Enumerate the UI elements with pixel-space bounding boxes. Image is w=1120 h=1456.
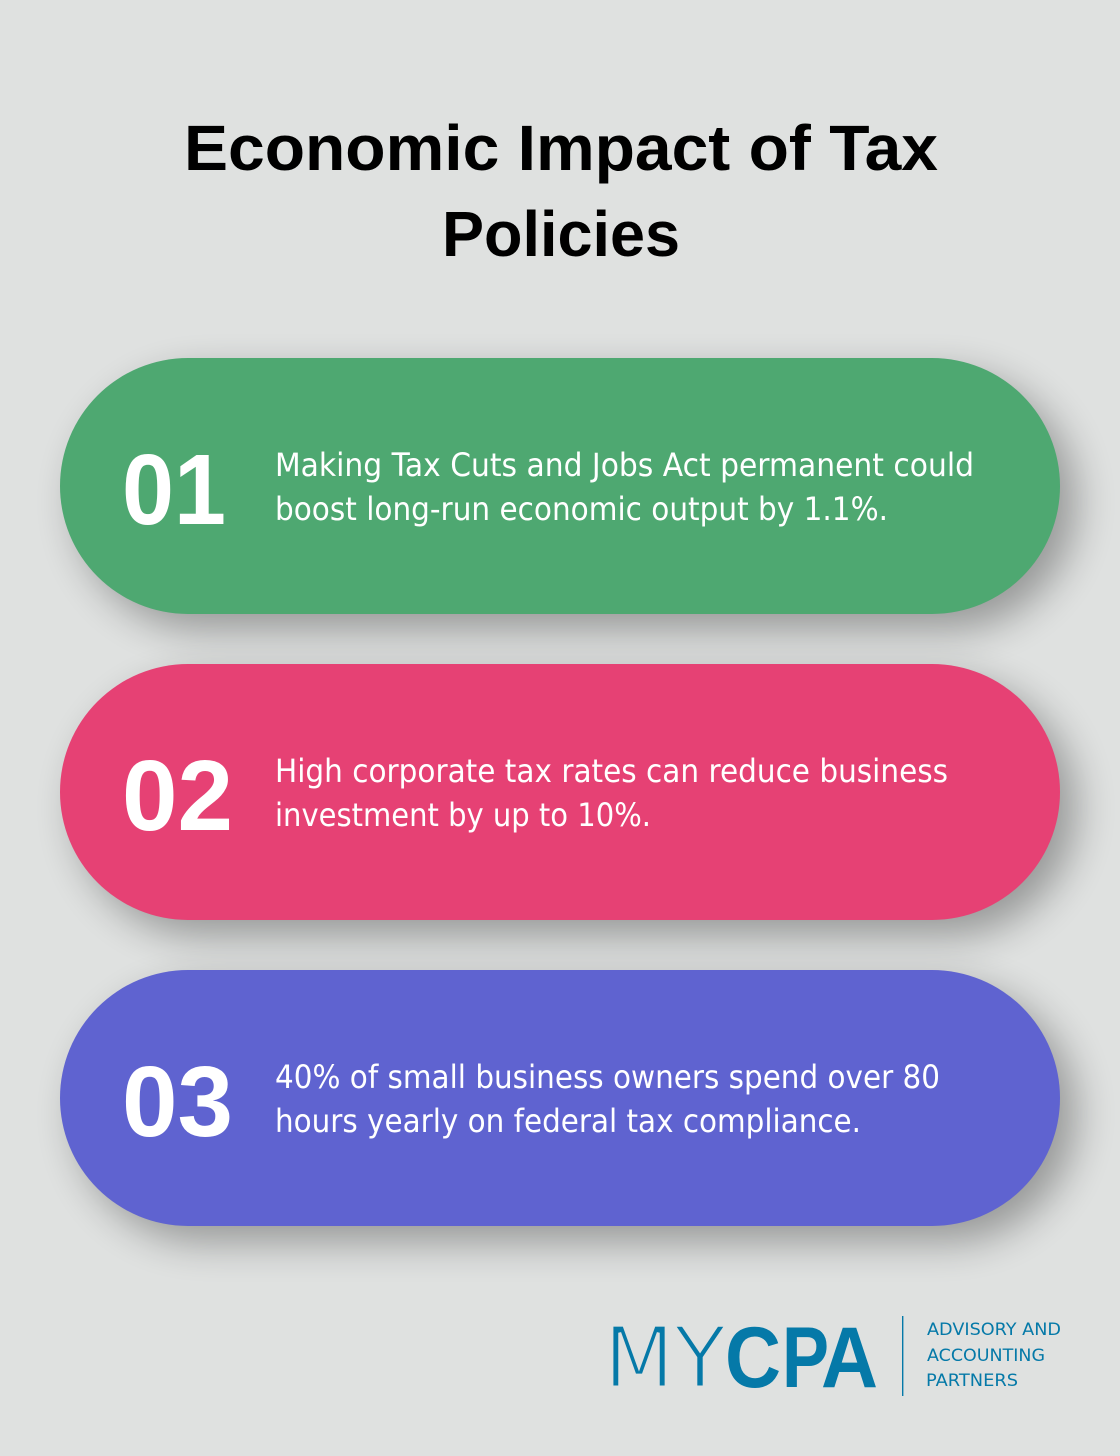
logo tagline: ADVISORY AND (927, 1320, 1061, 1339)
logo: MYCPA: M (604, 1309, 674, 1408)
title: Economic Impact of Tax (184, 112, 938, 184)
title (184, 112, 938, 270)
logo: MYCPA: A (821, 1310, 878, 1406)
text: item 01 (275, 446, 974, 528)
logo tagline (926, 1320, 1061, 1390)
text: item 02: investment by up to 10%. (275, 796, 651, 834)
panel: item 02 (60, 664, 1076, 936)
panel: item 01 (60, 358, 1076, 630)
logo tagline: ACCOUNTING (927, 1346, 1045, 1365)
logo: MYCPA: Y (673, 1309, 727, 1408)
logo tagline: PARTNERS (926, 1371, 1018, 1390)
logo: MYCPA (604, 1309, 1061, 1408)
number 01: 01 (122, 434, 226, 546)
number 02: 02 (122, 740, 233, 852)
text: item 02 (275, 752, 948, 834)
text: item 01: Making Tax Cuts and Jobs Act permanent could (275, 446, 974, 484)
panel: item 03 (60, 970, 1076, 1242)
text: item 01: boost long-run economic output by 1.1%. (275, 490, 888, 528)
text: item 02: High corporate tax rates can reduce business (275, 752, 948, 790)
number 03: 03 (122, 1046, 233, 1158)
title: Policies (442, 198, 680, 270)
text: item 03: hours yearly on federal tax compliance. (275, 1102, 861, 1140)
logo: MYCPA: C (725, 1310, 781, 1406)
text: item 03 (275, 1058, 940, 1140)
logo: MYCPA: P (782, 1310, 829, 1406)
text: item 03: 40% of small business owners spend over 80 (275, 1058, 940, 1096)
